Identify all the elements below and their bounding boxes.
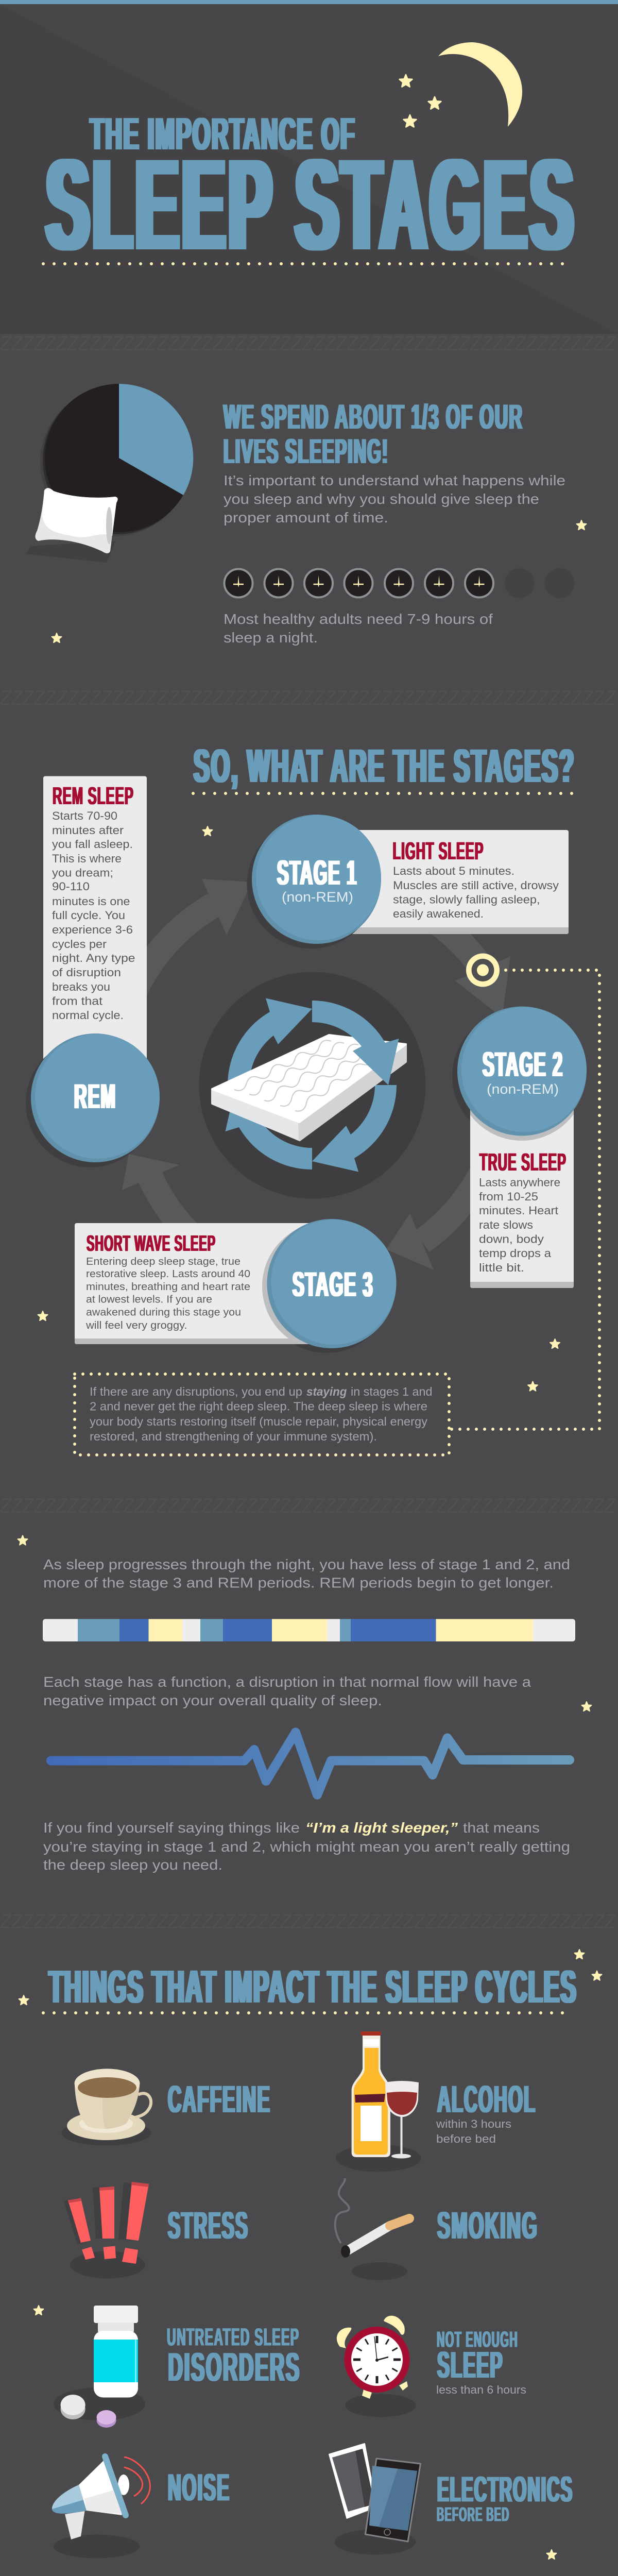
icon: star — [19, 1995, 29, 2005]
panel: light sleep — [350, 830, 569, 934]
label: not enough sleep: SLEEP — [437, 2345, 504, 2386]
icon: mattress — [212, 1035, 406, 1140]
text: CAFFEINE — [168, 2078, 271, 2121]
panel: short wave sleep: restorative sleep. Lasts around 40 — [86, 1268, 250, 1280]
dotted divider — [193, 792, 573, 795]
callout: disruptions: restored, and strengthening of your immune system). — [90, 1430, 377, 1443]
text: each stage has a function: negative impact on your overall quality of sleep. — [43, 1692, 382, 1708]
icon: star — [577, 520, 586, 530]
panel: REM sleep: REM SLEEP — [53, 783, 134, 810]
panel: light sleep: easily awakened. — [393, 907, 484, 920]
chart: disrupted heartbeat line — [51, 1732, 570, 1795]
panel: REM sleep — [43, 776, 147, 1064]
panel: true sleep: down, body — [479, 1232, 544, 1246]
icon: star — [428, 97, 441, 109]
dotted connector — [451, 970, 599, 1429]
panel: short wave sleep: at lowest levels. If you are — [86, 1294, 212, 1306]
panel: REM sleep: full cycle. You — [52, 909, 125, 922]
blue cycle arrow over mattress — [312, 1001, 399, 1085]
panel: REM sleep: 90-110 — [52, 880, 90, 893]
blue cycle arrows behind mattress — [226, 998, 397, 1172]
panel: REM sleep: normal cycle. — [52, 1009, 124, 1022]
text: each stage has a function: Each stage has a function, a disruption in that normal flow will have a — [43, 1674, 531, 1690]
text: STRESS — [168, 2204, 249, 2247]
text: light sleeper: the deep sleep you need. — [43, 1857, 222, 1873]
text: NOISE — [168, 2466, 230, 2509]
target marker — [466, 953, 500, 987]
arrow: stage 1 to stage 2 — [412, 907, 510, 1018]
pie chart: one third of life sleeping — [40, 384, 193, 536]
icon: star — [18, 1535, 28, 1545]
callout: disruptions: in stages 1 and — [351, 1385, 433, 1398]
intro text: proper amount of time. — [224, 510, 388, 526]
callout: disruptions: your body starts restoring itself (muscle repair, physical energy — [90, 1415, 428, 1428]
icon: star — [547, 2550, 556, 2559]
label: not enough sleep: less than 6 hours — [436, 2383, 526, 2396]
panel: short wave sleep — [75, 1222, 391, 1353]
stage circle: stage 1: (non-REM) — [282, 889, 353, 905]
panel: short wave sleep: minutes, breathing and heart rate — [86, 1281, 250, 1293]
stage circle: stage 1: STAGE 1 — [277, 853, 357, 892]
callout: disruptions: staying — [306, 1385, 347, 1398]
text: sleep progression: more of the stage 3 and REM periods. REM periods begin to get longer. — [43, 1574, 554, 1591]
panel: true sleep — [452, 1029, 574, 1288]
icon: beer bottle and wine glass — [336, 2031, 421, 2172]
panel: REM sleep: you fall asleep. — [52, 838, 133, 851]
icon: cigarette — [335, 2178, 409, 2280]
panel: light sleep: Muscles are still active, drowsy — [393, 879, 559, 892]
stage circle: REM: REM — [74, 1077, 116, 1116]
central dark disc — [199, 972, 425, 1198]
icon: star — [404, 115, 416, 127]
panel: short wave sleep: will feel very groggy. — [85, 1320, 187, 1331]
text: each stage has a function — [43, 1674, 531, 1708]
arrow: stage 3 to REM — [122, 1154, 203, 1247]
panel: REM sleep: This is where — [52, 852, 122, 865]
hours needed text — [224, 611, 493, 646]
panel: REM sleep: Starts 70-90 — [52, 809, 117, 822]
panel: true sleep: rate slows — [479, 1218, 533, 1231]
icon: star — [34, 2306, 43, 2315]
header panel — [0, 4, 618, 334]
icon: star — [550, 1339, 560, 1348]
label: not enough sleep — [436, 2327, 526, 2396]
panel: true sleep: minutes. Heart — [479, 1204, 558, 1217]
stage circle: stage 3 — [267, 1219, 397, 1348]
label: alcohol — [436, 2078, 536, 2145]
icon: pillow — [26, 488, 118, 563]
panel: REM sleep: from that — [52, 994, 102, 1008]
icon: alarm clock — [337, 2316, 416, 2417]
intro text: you sleep and why you should give sleep the — [224, 491, 539, 507]
icon: phones — [329, 2444, 420, 2554]
arrow: REM to stage 1 — [121, 879, 252, 1030]
hours needed text: Most healthy adults need 7-9 hours of — [224, 611, 493, 627]
heading: we spend about 1/3: LIVES SLEEPING! — [224, 432, 389, 471]
stage circle: stage 2 — [457, 1007, 587, 1136]
icon: star — [38, 1311, 47, 1320]
label: untreated sleep disorders: UNTREATED SLEEP — [167, 2324, 300, 2351]
intro text — [224, 472, 565, 526]
icon: star — [203, 826, 212, 836]
label: alcohol: before bed — [436, 2132, 496, 2145]
bar chart: stage progression — [43, 1619, 575, 1641]
icon: star — [592, 1971, 602, 1980]
label: untreated sleep disorders — [167, 2324, 301, 2389]
panel: light sleep: stage, slowly falling asleep, — [393, 893, 540, 906]
callout: disruptions — [75, 1374, 449, 1455]
panel: REM sleep: cycles per — [52, 938, 107, 951]
icon: crescent moon — [438, 42, 522, 127]
intro text: It’s important to understand what happens while — [224, 472, 565, 488]
icon: star — [575, 1950, 584, 1959]
stage circle: stage 1 — [247, 815, 381, 949]
text: sleep progression — [43, 1556, 570, 1591]
icon: stress exclamation marks — [64, 2182, 149, 2278]
panel: true sleep: from 10-25 — [479, 1190, 538, 1203]
panel: light sleep: LIGHT SLEEP — [392, 838, 484, 865]
title line: The Importance Of: THE IMPORTANCE OF — [90, 108, 356, 159]
icon: star — [582, 1702, 591, 1711]
panel: REM sleep: breaks you — [52, 980, 110, 993]
panel: short wave sleep: SHORT WAVE SLEEP — [87, 1231, 216, 1256]
label: untreated sleep disorders: DISORDERS — [168, 2344, 301, 2389]
panel: REM sleep: minutes after — [52, 824, 124, 837]
panel: REM sleep: of disruption — [52, 966, 121, 979]
icon: megaphone — [52, 2456, 150, 2558]
stage circle: stage 3: STAGE 3 — [293, 1265, 374, 1304]
text: light sleeper: “I’m a light sleeper,” — [305, 1820, 458, 1836]
panel: short wave sleep: awakened during this stage you — [86, 1307, 241, 1318]
text: sleep progression: As sleep progresses through the night, you have less of stage 1 and 2, and — [43, 1556, 570, 1572]
panel: REM sleep: night. Any type — [52, 952, 135, 964]
callout: disruptions: If there are any disruptions, you end up — [90, 1385, 302, 1398]
panel: true sleep: little bit. — [479, 1261, 524, 1274]
panel: true sleep: Lasts anywhere — [479, 1176, 560, 1189]
icon: star — [400, 75, 412, 87]
callout: disruptions: 2 and never get the right deep sleep. The deep sleep is where — [90, 1399, 427, 1413]
label: electronics before bed: BEFORE BED — [437, 2504, 510, 2526]
panel: REM sleep: you dream; — [52, 867, 113, 879]
panel: true sleep: temp drops a — [479, 1247, 552, 1260]
label: alcohol: within 3 hours — [436, 2117, 511, 2130]
label: not enough sleep: NOT ENOUGH — [437, 2327, 518, 2352]
panel: REM sleep: minutes is one — [52, 895, 130, 908]
panel: REM sleep: experience 3-6 — [52, 923, 133, 936]
text: light sleeper: If you find yourself saying things like — [43, 1820, 300, 1836]
hours needed text: sleep a night. — [224, 630, 318, 646]
text: light sleeper: that means — [463, 1820, 540, 1836]
icon: pill bottle — [54, 2306, 145, 2428]
stage circle: REM — [26, 1033, 160, 1167]
top accent bar — [0, 0, 618, 4]
heading: we spend about 1/3 — [224, 397, 523, 471]
icon: star — [52, 633, 62, 642]
dotted divider — [43, 262, 573, 265]
stage circle: stage 2: (non-REM) — [487, 1081, 559, 1097]
arrow: stage 2 to stage 3 — [386, 1144, 494, 1270]
clocks: 7 to 9 hours — [225, 568, 575, 598]
panel: light sleep: Lasts about 5 minutes. — [393, 865, 514, 877]
text: light sleeper — [43, 1820, 570, 1873]
icon: coffee cup — [62, 2069, 151, 2145]
label: electronics before bed — [437, 2469, 573, 2526]
panel: short wave sleep: Entering deep sleep stage, true — [86, 1256, 241, 1267]
text: light sleeper: you’re staying in stage 1 and 2, which might mean you aren’t really getting — [43, 1839, 570, 1855]
icon: star — [528, 1382, 538, 1391]
dotted divider — [43, 2011, 573, 2014]
